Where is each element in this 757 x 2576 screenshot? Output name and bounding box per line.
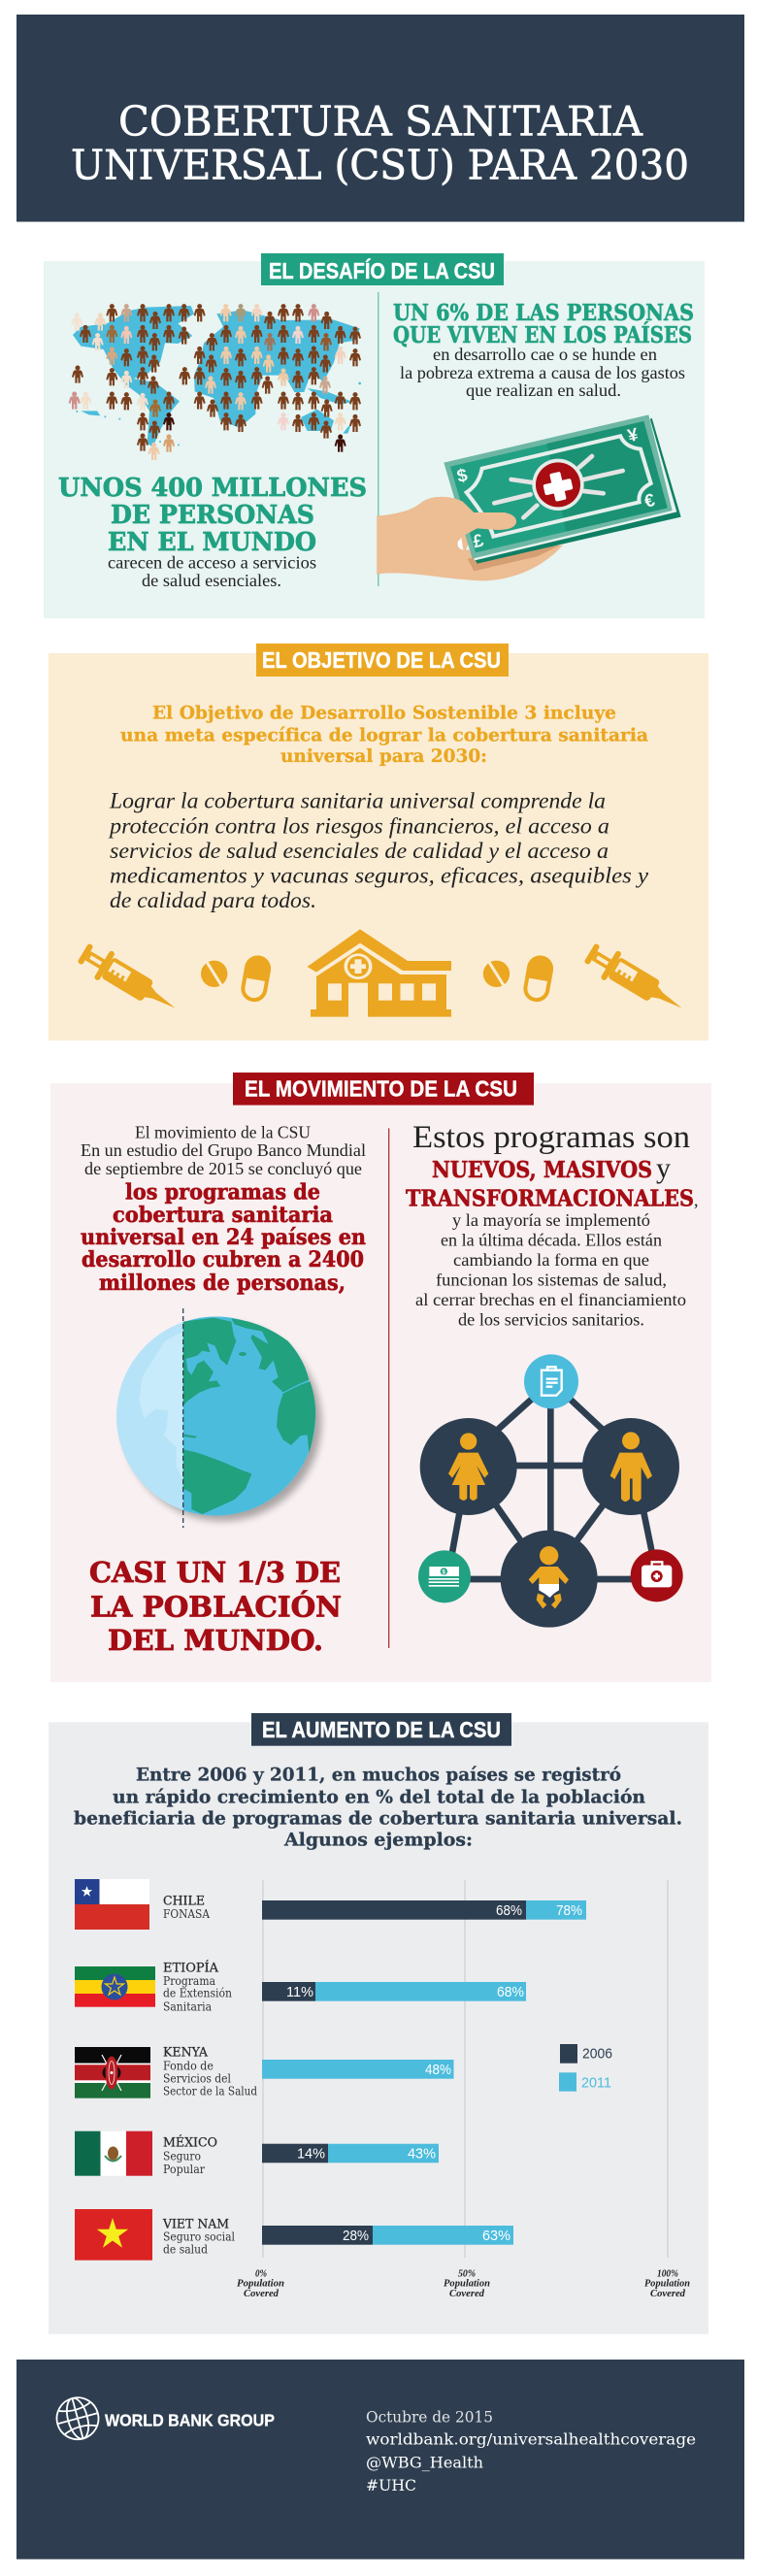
axis labels: Covered	[650, 2289, 686, 2299]
icon: woman	[448, 1433, 488, 1501]
bar: Kenya	[262, 2060, 454, 2079]
bar chart: population covered	[262, 1880, 668, 2258]
heading: estos programas: TRANSFORMACIONALES	[406, 1185, 694, 1211]
text: programas descripción: y la mayoría se implementó	[452, 1210, 650, 1230]
panel: el aumento de la CSU	[49, 1713, 708, 2334]
text: italic quotation	[108, 789, 649, 912]
label: México: MÉXICO	[163, 2135, 217, 2151]
text: italic quotation: Lograr la cobertura sanitaria universal comprende la	[109, 789, 606, 813]
callout: casi un tercio: DEL MUNDO.	[108, 1624, 323, 1657]
subheading: objetivo: El Objetivo de Desarrollo Sostenible 3 incluye	[152, 704, 616, 724]
axis labels: 50%	[458, 2268, 476, 2279]
bar: Etiopía	[262, 1982, 526, 2001]
label: Viet Nam: VIET NAM	[162, 2218, 229, 2232]
icon: syringe left	[75, 939, 183, 1022]
section tag: movimiento: EL MOVIMIENTO DE LA CSU	[245, 1075, 517, 1101]
subheading: aumento: Algunos ejemplos:	[283, 1831, 473, 1851]
subheading: objetivo	[120, 704, 648, 767]
flag: Viet Nam	[75, 2209, 152, 2261]
callout: casi un tercio: CASI UN 1/3 DE	[89, 1556, 341, 1589]
panel: el movimiento de la CSU	[50, 1073, 711, 1682]
axis labels: 100%	[657, 2268, 678, 2279]
text: italic quotation: de calidad para todos.	[110, 888, 316, 912]
bar: Etiopía: 68%	[497, 1984, 524, 2000]
flag: México	[75, 2131, 152, 2176]
text: 400 millones: EN EL MUNDO	[108, 528, 316, 557]
text: programas descripción: funcionan los sistemas de salud,	[436, 1270, 667, 1289]
text: 400 millones: de salud esenciales.	[142, 571, 281, 590]
logo: World Bank Group	[52, 2393, 275, 2444]
label: Etiopía	[163, 1961, 232, 2014]
subheading: aumento: Entre 2006 y 2011, en muchos países se registró	[136, 1766, 621, 1786]
label: Kenya: Fondo de	[163, 2060, 214, 2073]
label: Kenya	[163, 2045, 257, 2098]
subheading: objetivo: universal para 2030:	[280, 746, 487, 767]
callout: casi un tercio	[89, 1556, 342, 1657]
icon: capsule left	[240, 953, 273, 1002]
text: 400 millones: DE PERSONAS	[111, 501, 314, 530]
subheading: aumento: beneficiaria de programas de cobertura sanitaria universal.	[74, 1808, 682, 1829]
text: italic quotation: medicamentos y vacunas seguros, eficaces, asequibles y	[110, 863, 649, 887]
text: italic quotation: servicios de salud esenciales de calidad y el acceso a	[110, 839, 609, 863]
text: programas descripción: cambiando la forma en que	[453, 1250, 649, 1270]
legend: 2011	[581, 2075, 611, 2092]
text: estudio	[81, 1123, 366, 1178]
text: 6% de las personas: UN 6% DE LAS PERSONAS	[393, 300, 694, 326]
label: Etiopía: de Extensión	[163, 1987, 232, 2000]
label: Kenya: KENYA	[163, 2045, 209, 2060]
text: 6% de las personas: QUE VIVEN EN LOS PAÍSES	[393, 322, 692, 348]
heading: estos programas: Estos programas son	[412, 1120, 690, 1155]
label: México	[163, 2135, 217, 2176]
axis labels	[237, 2268, 690, 2299]
text: 400 millones: UNOS 400 MILLONES	[58, 474, 367, 503]
text: programas en 24 países: millones de personas,	[99, 1271, 346, 1296]
icon: stack of money: $	[442, 1569, 445, 1575]
bar: México: 43%	[408, 2146, 436, 2163]
text: 6% de las personas	[393, 300, 694, 400]
footer banner	[16, 2360, 744, 2559]
callout: casi un tercio: LA POBLACIÓN	[90, 1589, 342, 1623]
axis labels: Population	[444, 2279, 490, 2290]
bar: Chile: 68%	[496, 1902, 522, 1919]
subheading: aumento	[74, 1766, 682, 1851]
text: programas descripción: en la última década. Ellos están	[441, 1230, 662, 1249]
text: contact details: @WBG_Health	[366, 2454, 483, 2472]
axis labels: Population	[237, 2279, 284, 2290]
bar: Viet Nam: 63%	[482, 2228, 510, 2244]
label: Etiopía: Programa	[163, 1974, 215, 1988]
diagram: health system network	[418, 1354, 683, 1628]
text: contact details: #UHC	[366, 2476, 416, 2494]
section tag: desafío: EL DESAFÍO DE LA CSU	[269, 257, 495, 283]
subheading: objetivo: una meta específica de lograr la cobertura sanitaria	[120, 725, 648, 745]
label: Etiopía: ETIOPÍA	[163, 1961, 219, 1976]
bar: México: 14%	[297, 2146, 325, 2163]
icon: man	[610, 1432, 652, 1502]
icon: hand holding banknote	[377, 414, 681, 580]
icon: world map of people	[69, 304, 361, 460]
legend	[559, 2044, 612, 2092]
section tag: objetivo: EL OBJETIVO DE LA CSU	[262, 647, 501, 673]
bar: Viet Nam: 28%	[343, 2228, 369, 2244]
panel: el objetivo de la CSU	[49, 644, 708, 1040]
bar: Etiopía: 11%	[286, 1984, 313, 2000]
text: programas en 24 países: los programas de	[125, 1179, 320, 1205]
text: programas en 24 países	[81, 1179, 366, 1296]
icon: hand holding banknote: €	[642, 489, 657, 512]
axis labels: Covered	[449, 2289, 485, 2299]
heading: estos programas: ,	[694, 1190, 699, 1209]
icon: baby	[529, 1546, 569, 1608]
text: contact details: Octubre de 2015	[366, 2408, 493, 2427]
flag: Chile	[75, 1879, 149, 1930]
subheading: aumento: un rápido crecimiento en % del total de la población	[113, 1787, 646, 1807]
icon: hand holding banknote: $	[455, 464, 470, 486]
section tag: desafío	[261, 253, 504, 285]
text: 400 millones	[58, 474, 367, 590]
axis labels: Population	[644, 2279, 690, 2290]
icon: globe	[116, 1308, 321, 1528]
heading: estos programas: NUEVOS, MASIVOS	[432, 1157, 652, 1183]
icon: clipboard	[542, 1367, 562, 1396]
text: programas en 24 países: desarrollo cubren a 2400	[82, 1247, 364, 1272]
label: Etiopía: Sanitaria	[163, 2000, 212, 2014]
icon: pill right	[483, 961, 510, 987]
flag: Kenya	[75, 2047, 150, 2098]
text: programas en 24 países: cobertura sanitaria	[113, 1203, 333, 1228]
header banner	[16, 15, 744, 221]
icon: hand holding banknote: £	[471, 529, 486, 551]
flag: Etiopía	[75, 1966, 155, 2007]
text: programas descripción: de los servicios sanitarios.	[458, 1309, 644, 1329]
axis labels: Covered	[244, 2289, 280, 2299]
title	[71, 98, 689, 189]
title: UNIVERSAL (CSU) PARA 2030	[71, 142, 689, 189]
text: programas descripción	[415, 1210, 686, 1329]
icon: syringe right	[581, 939, 690, 1022]
heading: estos programas: y	[656, 1152, 671, 1184]
bar: México	[262, 2144, 439, 2163]
text: contact details	[366, 2408, 696, 2494]
text: programas en 24 países: universal en 24 países en	[81, 1225, 366, 1250]
label: Kenya: Sector de la Salud	[163, 2085, 257, 2098]
label: Kenya: Servicios del	[163, 2072, 231, 2086]
legend: 2006	[582, 2046, 612, 2063]
panel: el desafío de la CSU	[44, 253, 705, 618]
title: COBERTURA SANITARIA	[118, 98, 643, 146]
text: 6% de las personas: que realizan en salud.	[466, 380, 621, 400]
section tag: objetivo	[256, 644, 509, 677]
heading: estos programas	[406, 1120, 699, 1211]
icon: capsule right	[522, 953, 555, 1002]
text: estudio: En un estudio del Grupo Banco Mundial	[81, 1140, 366, 1160]
bar: Viet Nam	[262, 2226, 513, 2245]
label: Chile	[163, 1895, 210, 1921]
label: Chile: CHILE	[163, 1895, 205, 1909]
axis labels: 0%	[255, 2268, 267, 2279]
section tag: aumento: EL AUMENTO DE LA CSU	[262, 1717, 501, 1742]
label: Viet Nam	[162, 2218, 235, 2257]
text: contact details: worldbank.org/universalhealthcoverage	[366, 2430, 696, 2449]
label: México: Seguro	[163, 2150, 201, 2163]
logo: World Bank Group: WORLD BANK GROUP	[105, 2410, 275, 2429]
text: 400 millones: carecen de acceso a servicios	[108, 553, 316, 573]
icon: medical kit	[642, 1562, 672, 1587]
label: México: Popular	[163, 2163, 205, 2176]
icon: hospital	[307, 929, 451, 1017]
icon: hand holding banknote: ¥	[626, 423, 641, 446]
text: italic quotation: protección contra los riesgos financieros, el acceso a	[108, 813, 609, 838]
text: programas descripción: al cerrar brechas en el financiamiento	[415, 1290, 686, 1309]
text: estudio: de septiembre de 2015 se concluyó que	[84, 1159, 362, 1178]
label: Viet Nam: de salud	[163, 2243, 208, 2257]
label: Chile: FONASA	[163, 1907, 210, 1921]
section tag: aumento	[251, 1713, 511, 1746]
bar: Kenya: 48%	[425, 2062, 451, 2078]
text: 6% de las personas: en desarrollo cae o se hunde en	[433, 345, 657, 364]
bar: Chile: 78%	[556, 1902, 582, 1919]
text: estudio: El movimiento de la CSU	[135, 1123, 311, 1142]
icon: stack of money	[429, 1567, 459, 1587]
icon: pill left	[201, 961, 227, 987]
label: Viet Nam: Seguro social	[163, 2230, 235, 2244]
text: 6% de las personas: la pobreza extrema a causa de los gastos	[400, 363, 685, 382]
bar: Chile	[262, 1900, 586, 1920]
